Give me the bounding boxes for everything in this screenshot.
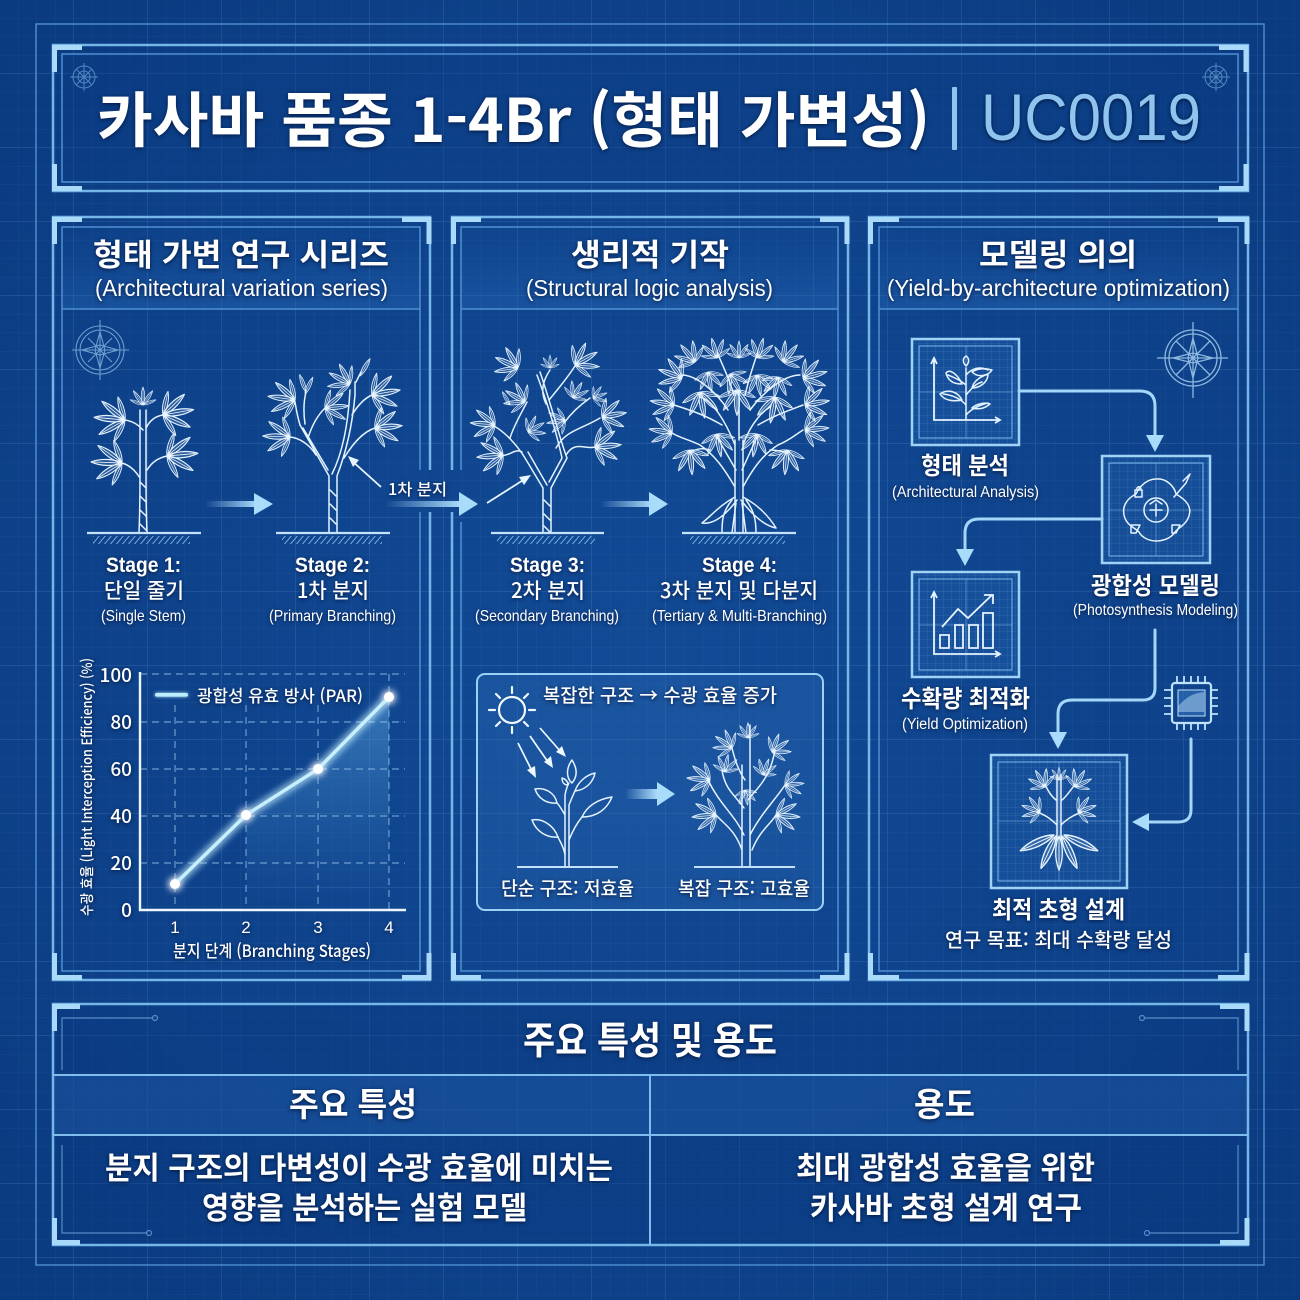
panel: architectural variation series	[53, 217, 430, 980]
stage 2 plant	[262, 357, 404, 544]
stage 3 label: Stage 3:	[510, 554, 585, 577]
stage 3 label	[475, 554, 619, 625]
label: photosynthesis modeling	[1073, 566, 1238, 619]
table title: 주요 특성 및 용도	[523, 1010, 777, 1065]
panel: yield-by-architecture optimization	[869, 217, 1248, 980]
arrow: analysis to modeling	[1019, 391, 1164, 452]
label: yield optimization: 수확량 최적화	[901, 679, 1030, 714]
stage 2 label: 1차 분지	[297, 575, 369, 605]
arrow: chip to optimal design	[1132, 739, 1191, 831]
icon: small compass left	[70, 63, 98, 91]
icon: processor chip	[1164, 676, 1218, 730]
stage 1 label: 단일 줄기	[104, 575, 184, 605]
icon: small compass right	[1202, 63, 1230, 91]
box: yield optimization	[912, 572, 1019, 677]
arrow: modeling to optimal design	[1049, 630, 1155, 749]
body text: uses: 최대 광합성 효율을 위한	[796, 1143, 1095, 1188]
icon: photosynthesis cycle	[1124, 474, 1190, 541]
stage 1 label: Stage 1:	[106, 554, 181, 577]
complex plant	[685, 722, 805, 867]
panel: structural logic analysis	[452, 217, 848, 980]
x axis tick labels: 4	[384, 918, 394, 937]
panel subheading: (Yield-by-architecture optimization)	[887, 275, 1230, 301]
column heading: key traits: 주요 특성	[289, 1078, 417, 1126]
box: optimal plant design	[991, 755, 1127, 888]
stage 3 label: (Secondary Branching)	[475, 608, 619, 625]
icon: sun	[489, 687, 535, 733]
body text: key traits: 분지 구조의 다변성이 수광 효율에 미치는	[105, 1143, 613, 1188]
arrow: stage 2 to 3	[385, 492, 478, 516]
label: optimal plant design: 연구 목표: 최대 수확량 달성	[945, 924, 1172, 953]
y axis title: 수광 효율 (Light Interception Efficiency) (%)	[77, 658, 97, 916]
callout: structure to efficiency	[477, 674, 823, 910]
y axis tick labels: 0	[121, 896, 132, 923]
y axis tick labels	[100, 661, 132, 923]
annotation label: 1차 분지	[388, 476, 447, 500]
x axis tick labels: 2	[241, 918, 251, 937]
stage 2 label: Stage 2:	[295, 554, 370, 577]
stage 3 plant	[469, 336, 630, 544]
x axis tick labels	[170, 918, 394, 937]
icon: optimal plant	[1017, 763, 1101, 870]
box: architectural analysis	[912, 339, 1019, 445]
label: optimal plant design: 최적 초형 설계	[992, 890, 1125, 925]
arrow: stage 3 to 4	[600, 492, 668, 516]
stage 4 label	[652, 554, 827, 625]
stage 1 label	[101, 554, 186, 625]
product code: UC0019	[981, 80, 1201, 154]
label: optimal plant design	[945, 890, 1172, 953]
complex structure label: 복잡 구조: 고효율	[678, 874, 810, 901]
stage 2 label	[269, 554, 396, 625]
panel heading: 모델링 의의	[979, 230, 1137, 275]
panel: key traits and uses table	[53, 1004, 1248, 1245]
label: architectural analysis: (Architectural Analysis)	[892, 484, 1039, 501]
stage 3 label: 2차 분지	[511, 575, 585, 605]
column heading: uses: 용도	[914, 1078, 975, 1126]
x axis tick labels: 1	[170, 918, 180, 937]
stage 4 label: (Tertiary & Multi-Branching)	[652, 608, 827, 625]
y axis tick labels: 60	[110, 755, 132, 782]
callout heading: 복잡한 구조 → 수광 효율 증가	[543, 681, 777, 708]
icon: plant on axes	[931, 356, 1000, 423]
panel subheading: (Architectural variation series)	[95, 275, 388, 301]
icon: bar chart with trend	[931, 592, 1000, 657]
data line	[170, 692, 394, 889]
arrow: stage 1 to 2	[205, 493, 273, 515]
y axis tick labels: 40	[110, 802, 132, 829]
arrow: modeling to yield	[956, 519, 1102, 566]
icon: compass	[1157, 322, 1228, 398]
y axis tick labels: 80	[110, 708, 132, 735]
annotation arrow: secondary branch	[487, 475, 531, 503]
stage 4 plant	[646, 334, 833, 544]
annotation arrow: primary branch	[348, 456, 381, 487]
x axis tick labels: 3	[313, 918, 323, 937]
label: architectural analysis	[892, 446, 1039, 501]
chart: light interception	[77, 658, 406, 962]
circuit decoration	[62, 1016, 1238, 1236]
simple structure label: 단순 구조: 저효율	[501, 874, 634, 901]
y axis tick labels: 20	[110, 849, 132, 876]
label: photosynthesis modeling: 광합성 모델링	[1091, 566, 1220, 601]
title separator	[952, 87, 957, 150]
panel heading: 생리적 기작	[571, 230, 729, 275]
stage 2 label: (Primary Branching)	[269, 608, 396, 625]
icon: compass	[72, 320, 129, 380]
body text: uses	[796, 1143, 1095, 1228]
primary branch annotation	[348, 456, 478, 516]
panel subheading: (Structural logic analysis)	[526, 275, 773, 301]
label: photosynthesis modeling: (Photosynthesis Modeling)	[1073, 602, 1238, 619]
label: yield optimization: (Yield Optimization)	[902, 716, 1028, 733]
stage 4 label: 3차 분지 및 다분지	[660, 575, 818, 605]
label: architectural analysis: 형태 분석	[921, 446, 1009, 481]
panel: header	[53, 45, 1248, 191]
body text: uses: 카사바 초형 설계 연구	[810, 1183, 1082, 1228]
icon: sunlight arrows	[518, 728, 566, 778]
y axis tick labels: 100	[100, 661, 132, 688]
x axis title: 분지 단계 (Branching Stages)	[173, 937, 371, 962]
stage 4 label: Stage 4:	[702, 554, 777, 577]
legend: 광합성 유효 방사 (PAR)	[197, 682, 363, 707]
panel heading: 형태 가변 연구 시리즈	[93, 230, 389, 275]
label: yield optimization	[901, 679, 1030, 733]
title: 카사바 품종 1-4Br (형태 가변성)	[97, 73, 930, 160]
stage 1 plant	[87, 387, 201, 544]
stage 1 label: (Single Stem)	[101, 608, 186, 625]
body text: key traits: 영향을 분석하는 실험 모델	[202, 1183, 527, 1228]
simple plant	[517, 760, 618, 867]
arrow: simple to complex	[625, 782, 675, 806]
body text: key traits	[105, 1143, 613, 1228]
box: photosynthesis modeling	[1102, 456, 1210, 563]
